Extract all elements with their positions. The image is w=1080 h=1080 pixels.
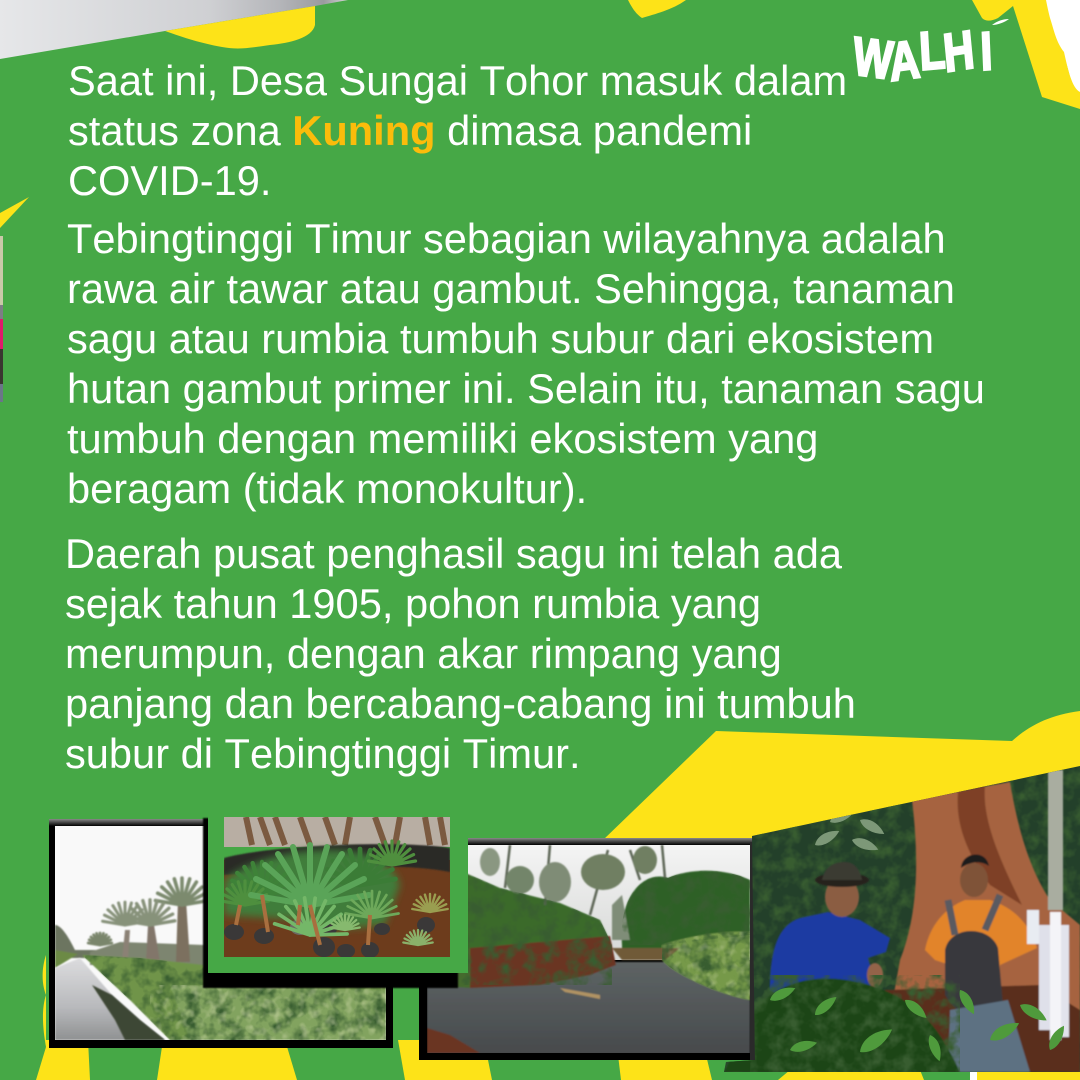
top-centre yellow shape [628, 0, 686, 18]
left edge photo sliver [0, 236, 3, 402]
paragraph: peat swamp ecosystem: beragam (tidak monokultur). [67, 465, 587, 512]
left yellow triangle [0, 197, 29, 228]
paragraph: sago history [65, 530, 856, 777]
photo: sago seedlings in green frame [203, 816, 468, 988]
top-right white corner [1040, 0, 1080, 95]
paragraph: peat swamp ecosystem: hutan gambut primer ini. Selain itu, tanaman sagu [67, 365, 985, 412]
person in blue shirt [770, 862, 890, 1005]
paragraph: peat swamp ecosystem: tumbuh dengan memiliki ekosistem yang [67, 415, 818, 462]
paragraph: sago history: sejak tahun 1905, pohon rumbia yang [65, 580, 761, 627]
WALHI logo: WALHI [851, 20, 993, 93]
photo: canal with sago palms [49, 819, 393, 1048]
white sliver at bottom edge [970, 1070, 977, 1080]
person in orange shirt [925, 855, 1037, 1072]
top-left grey brush stroke [0, 0, 348, 59]
paragraph: sago history: Daerah pusat penghasil sagu ini telah ada [65, 530, 842, 577]
yellow brush shapes at the bottom edge [36, 955, 1080, 1080]
paragraph: zona kuning status: COVID-19. [68, 157, 271, 204]
paragraph: sago history: merumpun, dengan akar rimpang yang [65, 630, 782, 677]
large yellow shape behind photos [603, 711, 1080, 840]
paragraph: zona kuning status [68, 57, 847, 204]
paragraph: zona kuning status: Saat ini, Desa Sungai Tohor masuk dalam [68, 57, 847, 104]
top-left yellow shape [165, 6, 315, 48]
paragraph: sago history: subur di Tebingtinggi Timur. [65, 730, 581, 777]
paragraph: peat swamp ecosystem: sagu atau rumbia tumbuh subur dari ekosistem [67, 315, 934, 362]
paragraph: peat swamp ecosystem [67, 215, 985, 512]
paragraph: zona kuning status: status zona Kuning dimasa pandemi [68, 107, 752, 154]
paragraph: sago history: panjang dan bercabang-cabang ini tumbuh [65, 680, 856, 727]
photo: two field workers beside a large tree [724, 766, 1080, 1072]
paragraph: peat swamp ecosystem: Tebingtinggi Timur sebagian wilayahnya adalah [67, 215, 946, 262]
top-right yellow shape [972, 0, 1080, 109]
logo accent stroke [992, 19, 1009, 25]
photo: river with cleared peat forest [419, 838, 755, 1060]
paragraph: peat swamp ecosystem: rawa air tawar atau gambut. Sehingga, tanaman [67, 265, 955, 312]
white pipes bundle [1027, 910, 1069, 1040]
